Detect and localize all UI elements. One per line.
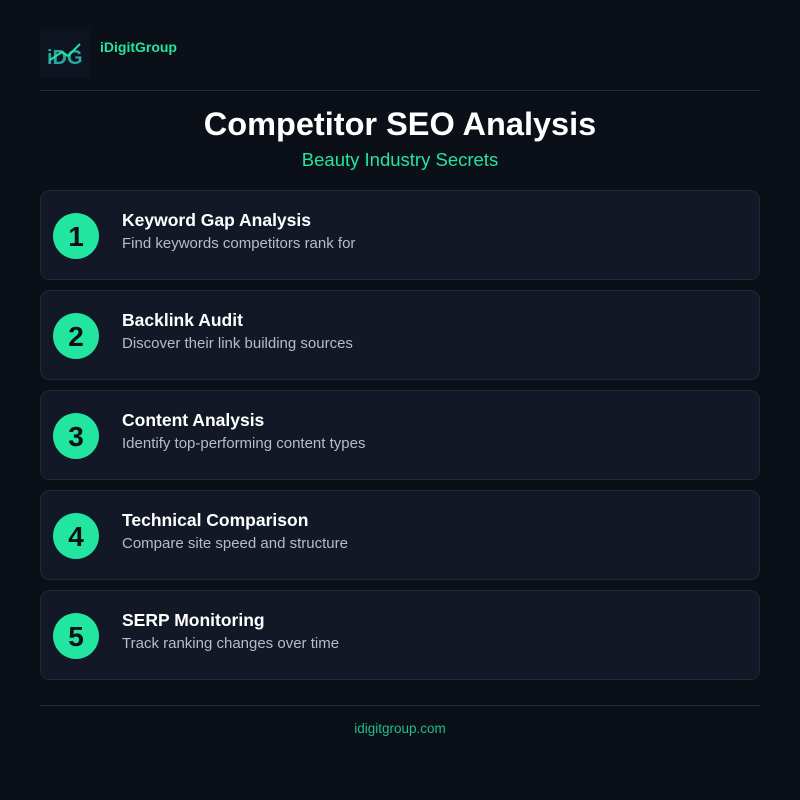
card 4: 4 xyxy=(68,521,84,552)
card 2: 2 xyxy=(68,321,84,352)
card 2: Discover their link building sources xyxy=(122,335,353,352)
card 3 xyxy=(40,390,760,480)
card 5: Track ranking changes over time xyxy=(122,635,339,652)
logo: iDG xyxy=(47,47,83,69)
subtitle: Beauty Industry Secrets xyxy=(302,149,498,170)
title: Competitor SEO Analysis xyxy=(204,106,596,142)
card 5: SERP Monitoring xyxy=(122,610,265,630)
card 5 xyxy=(40,590,760,680)
card 2 xyxy=(40,290,760,380)
card 3: 3 xyxy=(68,421,84,452)
card 1: Find keywords competitors rank for xyxy=(122,235,355,252)
card 4 xyxy=(40,490,760,580)
card 3: Content Analysis xyxy=(122,410,264,430)
card 5: 5 xyxy=(68,621,84,652)
card 1 xyxy=(40,190,760,280)
card 4: Technical Comparison xyxy=(122,510,308,530)
card 4: Compare site speed and structure xyxy=(122,535,348,552)
logo xyxy=(40,28,90,78)
brand name: iDigitGroup xyxy=(100,39,177,55)
footer: idigitgroup.com xyxy=(354,721,446,736)
card 3: Identify top-performing content types xyxy=(122,435,365,452)
card 2: Backlink Audit xyxy=(122,310,243,330)
card 1: Keyword Gap Analysis xyxy=(122,210,311,230)
card 1: 1 xyxy=(68,221,84,252)
